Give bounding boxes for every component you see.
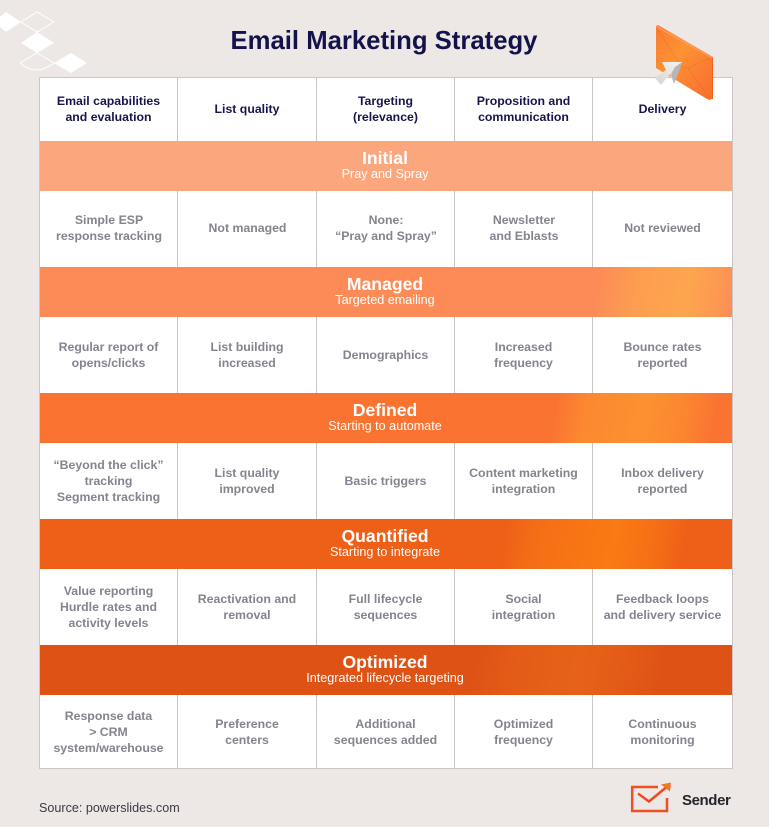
row: defined: reported [638, 482, 687, 496]
row: managed [59, 317, 701, 393]
row: quantified: Value reporting [64, 584, 153, 598]
row: defined [53, 443, 704, 519]
column headers: and evaluation [65, 110, 152, 124]
row: managed: frequency [494, 356, 553, 370]
row: defined: integration [492, 482, 555, 496]
band: Quantified: Starting to integrate [330, 545, 440, 559]
row: managed: reported [638, 356, 687, 370]
band: Managed: Targeted emailing [335, 293, 435, 307]
row: optimized: monitoring [630, 732, 695, 746]
row: defined: Content marketing [469, 466, 578, 480]
row: defined: improved [219, 482, 275, 496]
row: quantified: sequences [354, 608, 417, 622]
row: managed: increased [218, 356, 276, 370]
row: quantified: Hurdle rates and [60, 600, 157, 614]
row: initial: “Pray and Spray” [335, 229, 437, 243]
band: Initial: Initial [362, 148, 408, 168]
title: Email Marketing Strategy [231, 27, 537, 55]
decorative diamonds [0, 12, 86, 73]
column headers: (relevance) [353, 110, 418, 124]
row: initial: Simple ESP [75, 213, 143, 227]
row: managed: opens/clicks [72, 356, 145, 370]
row: initial: None: [369, 213, 403, 227]
column headers: Proposition and [477, 94, 570, 108]
row: quantified: removal [223, 608, 271, 622]
row: defined: List quality [215, 466, 279, 480]
row: optimized [53, 695, 697, 768]
row: initial: and Eblasts [489, 229, 559, 243]
row: managed: Bounce rates [624, 340, 701, 354]
band: Quantified: Quantified [342, 526, 428, 546]
row: quantified: Reactivation and [198, 592, 296, 606]
source note: Source: powerslides.com [39, 801, 180, 815]
row: quantified: Social [505, 592, 542, 606]
column headers: Email capabilities [57, 94, 160, 108]
row: optimized: system/warehouse [53, 740, 164, 754]
row: managed: Regular report of [59, 340, 158, 354]
row: defined: Inbox delivery [621, 466, 704, 480]
row: defined: “Beyond the click” [53, 458, 164, 472]
icon: envelope with arrow [655, 25, 713, 100]
row: initial: response tracking [56, 229, 162, 243]
row: managed: Demographics [343, 348, 428, 362]
row: quantified: and delivery service [604, 608, 721, 622]
band: Defined [40, 393, 732, 443]
row: managed: Increased [495, 340, 552, 354]
logo wordmark: Sender [682, 792, 730, 808]
row: defined: tracking [85, 474, 132, 488]
column headers [57, 78, 686, 141]
logo mark [630, 782, 671, 812]
row: quantified: Full lifecycle [349, 592, 422, 606]
band: Quantified [40, 519, 732, 569]
column headers: Delivery [639, 102, 686, 116]
band: Optimized: Optimized [342, 652, 428, 672]
row: quantified: activity levels [68, 616, 148, 630]
band: Optimized: Integrated lifecycle targeting [306, 671, 464, 685]
row: quantified: Feedback loops [616, 592, 709, 606]
row: optimized: Continuous [628, 716, 697, 730]
row: optimized: sequences added [334, 732, 437, 746]
row: defined: Segment tracking [57, 490, 160, 504]
band: Optimized [40, 645, 732, 695]
row: optimized: Preference [215, 716, 279, 730]
band: Initial: Pray and Spray [342, 167, 428, 181]
column headers: Targeting [358, 94, 413, 108]
row: optimized: frequency [494, 732, 553, 746]
row: managed: List building [210, 340, 284, 354]
row: defined: Basic triggers [344, 474, 426, 488]
logo: Sender [630, 782, 731, 812]
band: Managed [40, 267, 732, 317]
row: initial [56, 191, 701, 267]
row: quantified: integration [492, 608, 555, 622]
row: initial: Not managed [209, 221, 286, 235]
row: optimized: Response data [65, 708, 152, 722]
band: Defined: Defined [353, 400, 417, 420]
column headers: List quality [215, 102, 279, 116]
row: initial: Not reviewed [624, 221, 701, 235]
row: quantified [60, 569, 721, 645]
row: optimized: centers [225, 732, 269, 746]
row: optimized: Additional [355, 716, 416, 730]
row: optimized: Optimized [494, 716, 553, 730]
column headers: communication [478, 110, 569, 124]
row: optimized: > CRM [89, 724, 128, 738]
band: Initial [40, 141, 732, 191]
band: Defined: Starting to automate [328, 419, 442, 433]
row: initial: Newsletter [493, 213, 555, 227]
strategy table [39, 77, 733, 769]
band: Managed: Managed [347, 274, 423, 294]
